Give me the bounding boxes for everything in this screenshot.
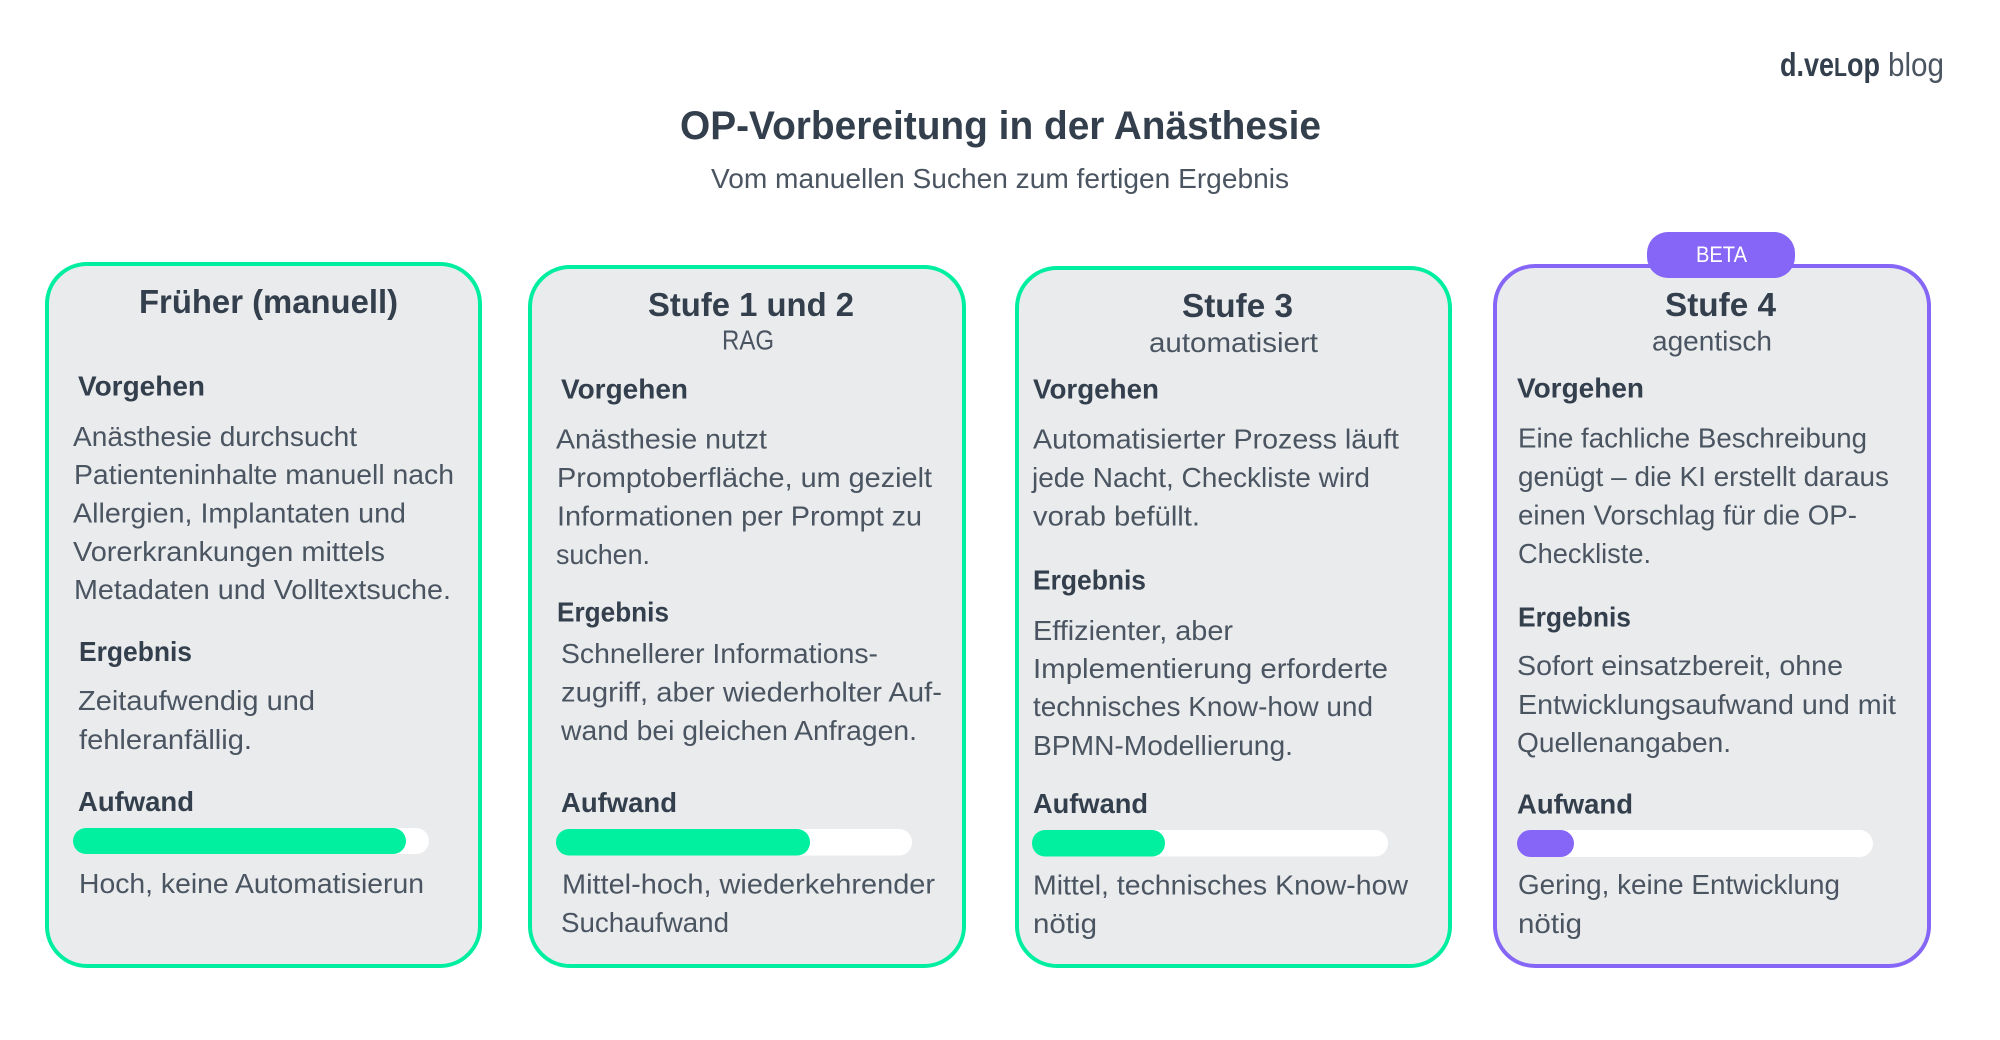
heading: Stufe 1 und 2: Stufe 1 und 2: [648, 286, 854, 323]
text block: Vorgehen: Vorerkrankungen mittels: [73, 536, 385, 567]
text block: Vorgehen: genügt – die KI erstellt daraus: [1518, 461, 1889, 492]
logo: d.velop blog: blog: [1888, 46, 1944, 83]
panel: Stufe 3: [1017, 268, 1450, 966]
text block: Ergebnis: Schnellerer Informations-: [561, 638, 878, 669]
progress bar: Aufwand mittel: [1032, 830, 1388, 856]
heading: Aufwand: Aufwand: [78, 786, 194, 817]
heading: Früher (manuell): Früher (manuell): [139, 283, 398, 320]
text block: Vorgehen: Anästhesie nutzt: [556, 424, 767, 454]
text block: Ergebnis: fehleranfällig.: [79, 724, 252, 755]
heading: Vorgehen: Vorgehen: [1517, 372, 1644, 404]
text block: Vorgehen: einen Vorschlag für die OP-: [1518, 500, 1857, 530]
text block: Vorgehen: Eine fachliche Beschreibung: [1518, 422, 1867, 454]
heading: Vorgehen: Vorgehen: [78, 370, 205, 402]
logo: d.velop blog: d.veLop: [1780, 46, 1880, 83]
panel: Früher (manuell): [47, 264, 480, 966]
text block: Aufwand: Gering, keine Entwicklung: [1518, 869, 1840, 900]
panel: Stufe 1 und 2: [530, 267, 964, 966]
subheading: RAG: RAG: [722, 324, 774, 356]
progress bar: Aufwand hoch: [73, 828, 429, 854]
subtitle: Vom manuellen Suchen zum fertigen Ergebnis: [711, 163, 1289, 194]
text block: Ergebnis: technisches Know-how und: [1033, 691, 1373, 722]
progress bar: Aufwand gering: [1517, 830, 1873, 857]
text block: Vorgehen: Automatisierter Prozess läuft: [1033, 424, 1399, 454]
progress bar: Aufwand mittel-hoch: [556, 829, 912, 856]
text block: Ergebnis: wand bei gleichen Anfragen.: [560, 715, 917, 746]
text block: Vorgehen: vorab befüllt.: [1033, 500, 1200, 532]
text block: Aufwand: [1033, 870, 1409, 939]
text block: Vorgehen: Patienteninhalte manuell nach: [74, 459, 454, 490]
text block: Ergebnis: [1033, 615, 1388, 761]
heading: Ergebnis: Ergebnis: [1518, 602, 1631, 632]
text block: Vorgehen: Metadaten und Volltextsuche.: [74, 574, 451, 605]
text block: Aufwand: nötig: [1518, 908, 1582, 939]
text block: Vorgehen: Anästhesie durchsucht: [73, 421, 357, 452]
text block: Vorgehen: Checkliste.: [1518, 538, 1651, 569]
heading: Ergebnis: Ergebnis: [1033, 564, 1146, 596]
text block: Ergebnis: zugriff, aber wiederholter Auf-: [561, 676, 942, 708]
text block: Vorgehen: [556, 424, 932, 570]
text block: Vorgehen: jede Nacht, Checkliste wird: [1031, 462, 1370, 493]
text block: Ergebnis: [1517, 650, 1896, 758]
text block: Aufwand: Mittel-hoch, wiederkehrender: [562, 868, 935, 900]
text block: Vorgehen: Allergien, Implantaten und: [73, 498, 406, 528]
text block: Ergebnis: Quellenangaben.: [1517, 727, 1731, 758]
text block: Ergebnis: Zeitaufwendig und: [78, 685, 315, 716]
text block: Ergebnis: [78, 685, 315, 755]
heading: Aufwand: Aufwand: [561, 787, 677, 818]
panel: Stufe 4: [1495, 232, 1929, 966]
heading: Aufwand: Aufwand: [1033, 788, 1148, 819]
heading: Vorgehen: Vorgehen: [561, 374, 688, 404]
heading: Aufwand: Aufwand: [1517, 788, 1633, 820]
subheading: agentisch: agentisch: [1652, 326, 1772, 356]
text block: Vorgehen: Informationen per Prompt zu: [557, 500, 922, 532]
heading: Stufe 3: Stufe 3: [1182, 287, 1293, 324]
text block: Aufwand: nötig: [1033, 908, 1097, 939]
text block: Ergebnis: Implementierung erforderte: [1033, 653, 1388, 684]
text block: Aufwand: Mittel, technisches Know-how: [1033, 870, 1409, 900]
text block: Ergebnis: Entwicklungsaufwand und mit: [1518, 689, 1896, 720]
heading: Ergebnis: Ergebnis: [557, 596, 669, 628]
heading: Ergebnis: Ergebnis: [79, 636, 192, 667]
text block: Vorgehen: [73, 421, 454, 605]
text block: Ergebnis: Sofort einsatzbereit, ohne: [1517, 650, 1843, 681]
title: OP-Vorbereitung in der Anästhesie: [680, 104, 1321, 148]
text block: Vorgehen: suchen.: [556, 539, 650, 570]
text block: Aufwand: Suchaufwand: [561, 907, 729, 938]
text block: Ergebnis: BPMN-Modellierung.: [1033, 730, 1293, 761]
text block: Ergebnis: [560, 638, 942, 746]
badge: BETA: BETA: [1696, 242, 1747, 267]
heading: Stufe 4: Stufe 4: [1665, 286, 1777, 323]
text block: Aufwand: [561, 868, 935, 938]
subheading: automatisiert: automatisiert: [1149, 327, 1318, 358]
text block: Aufwand: Hoch, keine Automatisierun: [79, 868, 424, 899]
text block: Vorgehen: [1031, 424, 1399, 532]
badge: BETA: [1647, 232, 1795, 278]
text block: Aufwand: [1518, 869, 1840, 939]
text block: Vorgehen: Promptoberfläche, um gezielt: [557, 462, 932, 493]
logo: d.velop blog: [1780, 46, 1944, 83]
text block: Ergebnis: Effizienter, aber: [1033, 615, 1233, 646]
heading: Vorgehen: Vorgehen: [1033, 374, 1159, 404]
text block: Vorgehen: [1518, 422, 1889, 569]
